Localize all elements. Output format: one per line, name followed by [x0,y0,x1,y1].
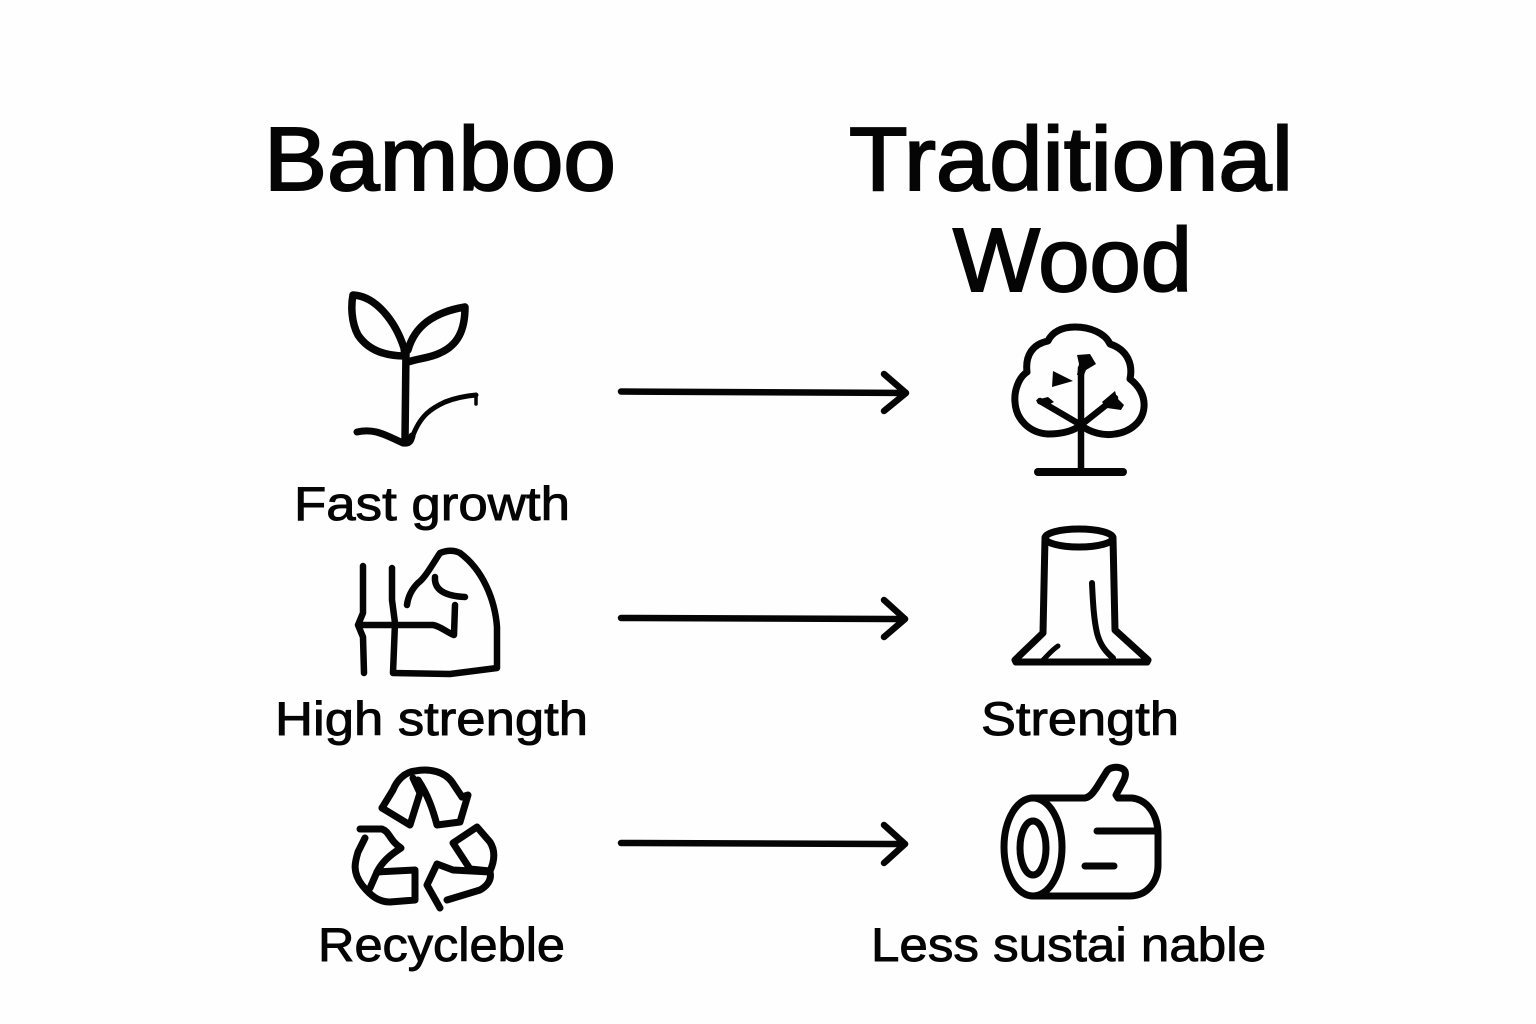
heading: Traditional Wood: Traditional [849,110,1293,210]
arrow: row 1 [621,374,906,411]
arrow: row 2 [621,600,905,637]
label: Fast growth: Fast growth [294,477,570,530]
heading: Traditional Wood [849,110,1293,311]
icon: flexed arm with bamboo [358,551,497,674]
label: Strength: Strength [981,692,1179,745]
heading: Traditional Wood: Wood [953,211,1192,311]
icon: tree [1015,327,1144,472]
icon: log [1004,767,1158,896]
label: Recycleble: Recycleble [318,918,565,971]
label: High strength: High strength [275,692,588,745]
icon: tree stump [1015,529,1148,662]
icon: recycle [355,770,494,908]
heading: Bamboo: Bamboo [264,110,616,210]
icon: sprout [352,295,476,443]
label: Less sustai nable: Less sustai nable [871,918,1266,971]
arrow: row 3 [621,825,905,863]
